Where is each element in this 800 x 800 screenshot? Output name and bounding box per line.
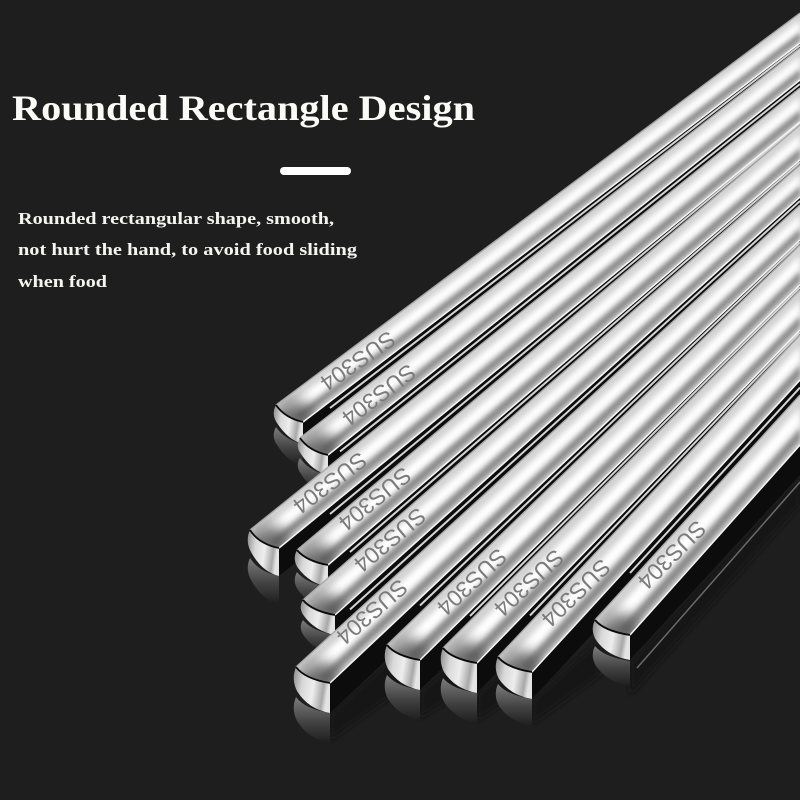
chopstick 1 <box>274 12 800 442</box>
chopstick 8 <box>440 290 800 693</box>
description text <box>18 209 358 291</box>
chopsticks <box>240 0 800 720</box>
chopstick 3 <box>248 88 800 576</box>
chopstick 4: SUS304 <box>333 462 416 536</box>
description text: when food <box>18 272 107 291</box>
description text: not hurt the hand, to avoid food sliding <box>18 240 358 259</box>
chopstick 8: SUS304 <box>489 544 569 622</box>
chopstick 2 <box>298 48 800 472</box>
chopstick 10: SUS304 <box>632 516 711 595</box>
chopstick reflections <box>248 427 800 743</box>
title: Rounded Rectangle Design <box>12 88 475 128</box>
chopstick 5 <box>300 164 800 634</box>
chopstick 7: SUS304 <box>432 543 512 621</box>
chopstick 4 <box>294 124 800 584</box>
chopstick 6 <box>294 204 800 713</box>
chopstick 6: SUS304 <box>331 574 413 650</box>
chopstick 7 <box>384 244 800 690</box>
chopstick 9: SUS304 <box>536 554 616 632</box>
chopstick 5: SUS304 <box>349 503 431 578</box>
chopstick 3: SUS304 <box>288 447 372 519</box>
chopstick 1: SUS304 <box>315 326 401 396</box>
chopstick 9 <box>496 334 800 699</box>
chopstick 10 <box>592 394 800 660</box>
chopstick 2: SUS304 <box>337 359 421 431</box>
divider bar <box>280 167 351 175</box>
description text: Rounded rectangular shape, smooth, <box>18 209 334 228</box>
